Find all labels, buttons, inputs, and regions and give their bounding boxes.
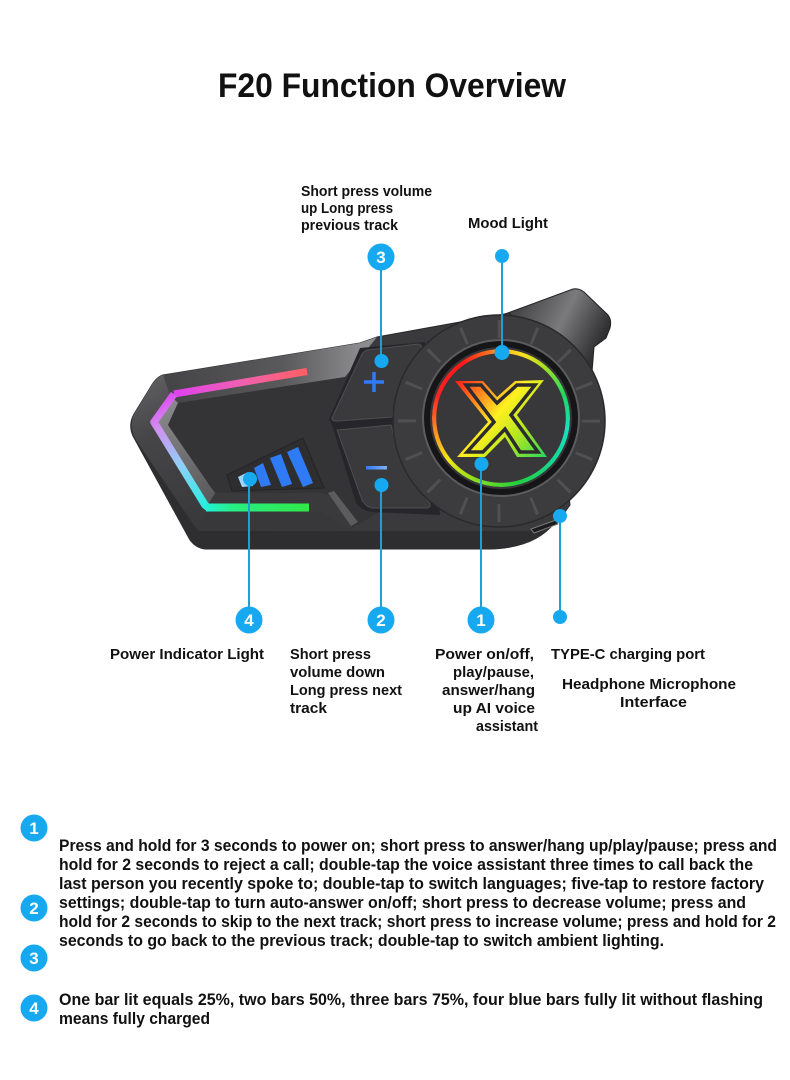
port detail <box>531 520 558 533</box>
list badge 3: 3 <box>29 949 39 968</box>
label: volume down: volume down <box>290 664 385 681</box>
label: headphone microphone interface: Interface <box>620 694 687 711</box>
battery panel <box>227 438 324 491</box>
battery instructions text: One bar lit equals 25%, two bars 50%, three bars 75%, four blue bars fully lit without flashing <box>59 991 763 1009</box>
lower band <box>198 512 352 531</box>
button instructions text: last person you recently spoke to; double-tap to switch languages; five-tap to restore factory <box>59 875 765 893</box>
light strip: left <box>154 394 208 508</box>
label: headphone microphone interface: Headphone Microphone <box>562 676 736 693</box>
label: power button: up AI voice <box>453 700 535 717</box>
list badge 2 <box>20 894 48 922</box>
X logo <box>455 380 547 457</box>
list badge 2: 2 <box>29 899 39 918</box>
callout 2: volume down <box>368 478 394 634</box>
title: F20 Function Overview <box>218 67 567 105</box>
callout 3: volume up: 3 <box>376 248 386 267</box>
callout 4: power indicator <box>236 472 262 634</box>
battery instructions text: means fully charged <box>59 1010 210 1028</box>
inner left band <box>154 395 215 508</box>
outer dial <box>393 315 605 527</box>
battery bars <box>238 447 313 487</box>
list badge 1 <box>20 814 48 842</box>
label: volume down: Short press <box>290 646 371 663</box>
label: power button <box>435 646 538 735</box>
label: charging port: TYPE-C charging port <box>551 646 705 663</box>
list badge 4: 4 <box>29 999 39 1018</box>
bevel highlight <box>328 491 358 526</box>
label: power button: answer/hang <box>442 682 535 699</box>
minus button <box>337 425 430 508</box>
device lower shell <box>136 440 556 549</box>
label: volume up <box>301 183 432 234</box>
button instructions text <box>59 837 777 950</box>
label: power button: Power on/off, <box>435 646 534 663</box>
plus button <box>332 344 422 421</box>
callout: charging port <box>553 509 567 624</box>
plus sign <box>364 372 384 392</box>
minus sign <box>366 466 387 470</box>
callout: mood light <box>494 249 510 360</box>
dark face <box>168 370 400 528</box>
dial ticks <box>407 329 591 513</box>
label: power button: play/pause, <box>453 664 534 681</box>
button surround <box>329 342 440 515</box>
inner disc <box>430 347 572 489</box>
label: volume up: Short press volume <box>301 183 432 200</box>
left outer bevel <box>132 375 206 531</box>
list badge 4 <box>20 994 48 1022</box>
button instructions text: hold for 2 seconds to reject a call; double-tap the voice assistant three times to call back the <box>59 856 753 874</box>
device body <box>131 313 570 549</box>
label: volume down: Long press next <box>290 682 402 699</box>
label: volume up: up Long press <box>301 200 393 217</box>
callout 4: power indicator: 4 <box>244 611 254 630</box>
mood light ring <box>432 349 570 487</box>
light strip: bottom <box>206 504 309 512</box>
list badge 1: 1 <box>29 819 39 838</box>
top band <box>163 337 377 403</box>
callout 1: power button: 1 <box>476 611 486 630</box>
device fin <box>505 289 611 372</box>
label: power button: assistant <box>476 718 538 735</box>
label: volume down <box>290 646 402 717</box>
list badge 3 <box>20 944 48 972</box>
button instructions text: seconds to go back to the previous track; double-tap to switch ambient lighting. <box>59 932 664 950</box>
inner disc rim <box>423 340 579 496</box>
callout 2: volume down: 2 <box>376 611 386 630</box>
light strip: top <box>174 372 307 394</box>
label: volume up: previous track <box>301 217 399 234</box>
label: headphone microphone interface <box>562 676 736 711</box>
callout 1: power button <box>468 457 494 634</box>
label: mood light: Mood Light <box>468 215 548 232</box>
button instructions text: settings; double-tap to turn auto-answer on/off; short press to decrease volume; press and <box>59 894 746 912</box>
label: volume down: track <box>290 700 328 717</box>
battery instructions text <box>59 991 763 1028</box>
callout 3: volume up <box>368 244 394 368</box>
label: power indicator: Power Indicator Light <box>110 646 264 663</box>
